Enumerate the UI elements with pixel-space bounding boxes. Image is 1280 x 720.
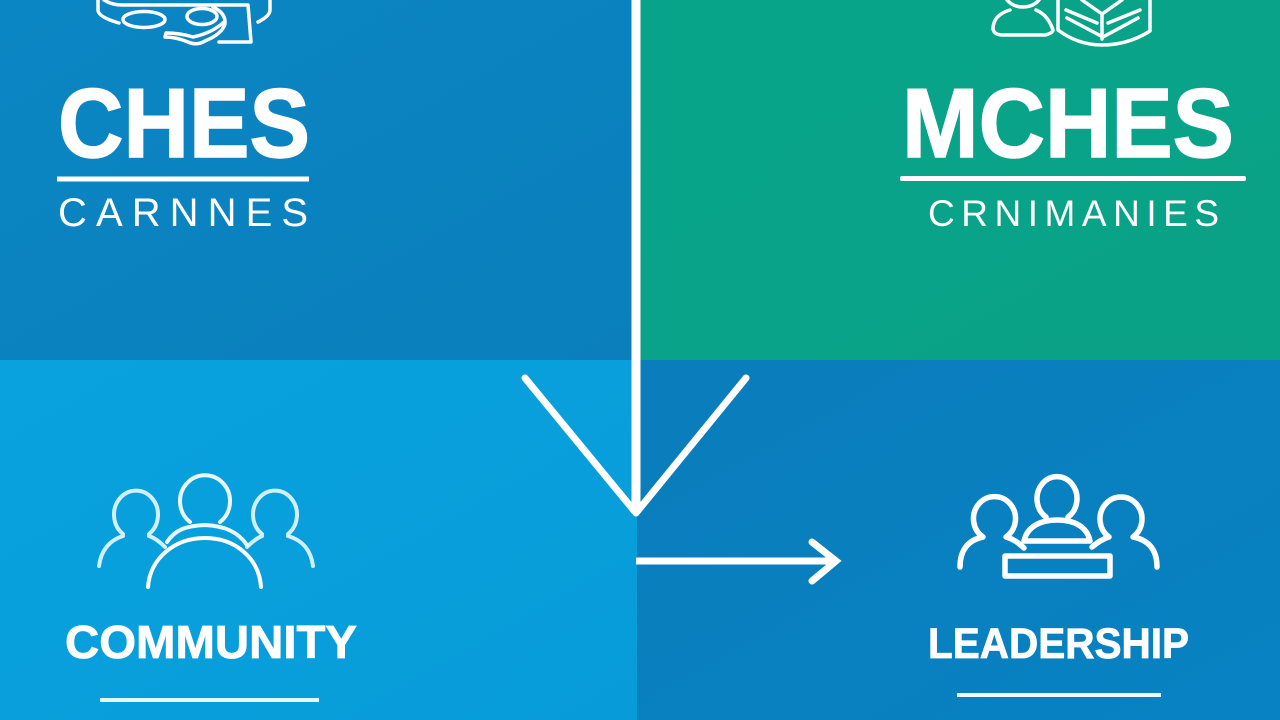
divider rule: COMMUNITY [100,698,319,702]
icon: top left cropped outline [98,0,270,44]
arrow: vertical line into V shape [525,0,746,513]
divider rule: LEADERSHIP [957,693,1161,697]
panel: top right green [640,0,1280,360]
panel: bottom left light blue [0,360,637,720]
divider rule: MCHES [900,176,1246,181]
arrow: right pointing to leadership [636,542,836,581]
subheading: CARNNES: CARNNES [58,191,308,235]
icon: leadership group at table [960,477,1157,576]
panel: bottom right blue [637,360,1280,720]
divider rule: CHES [57,176,309,182]
heading: CHES: CHES [58,68,310,178]
label: COMMUNITY: COMMUNITY [65,616,357,668]
panel: top left blue [0,0,634,360]
icon: community group [99,475,313,587]
icon: person with open book [993,0,1150,45]
label: LEADERSHIP: LEADERSHIP [928,620,1189,668]
subheading: CRNIMANIES: CRNIMANIES [928,193,1219,234]
heading: MCHES: MCHES [902,68,1234,178]
